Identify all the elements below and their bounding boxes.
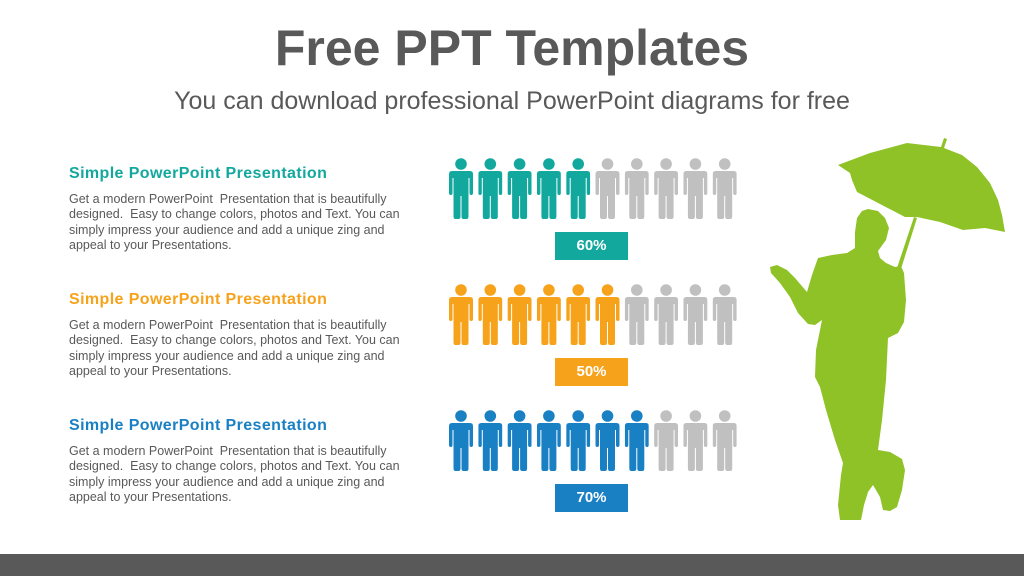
- label 50%: [555, 358, 628, 386]
- text block 1: Get a modern PowerPoint Presentation that is beautifully designed. Easy to change colors, photos and Text. You can simply impress your audience and add a unique zing and appeal to your Presentations.: [69, 192, 400, 252]
- label 70%: 70%: [576, 489, 607, 506]
- text block 3: [69, 417, 400, 504]
- text block 1: Simple PowerPoint Presentation: [69, 165, 327, 182]
- text block 1: [69, 165, 400, 252]
- text block 3: Get a modern PowerPoint Presentation that is beautifully designed. Easy to change colors, photos and Text. You can simply impress your audience and add a unique zing and appeal to your Presentations.: [69, 444, 400, 504]
- title: Free PPT Templates: [275, 20, 749, 76]
- label 60%: 60%: [576, 237, 607, 254]
- text block 2: Simple PowerPoint Presentation: [69, 291, 327, 308]
- footer bar: [0, 554, 1024, 576]
- text block 2: [69, 291, 400, 378]
- label 50%: 50%: [576, 363, 607, 380]
- label 70%: [555, 484, 628, 512]
- text block 2: Get a modern PowerPoint Presentation that is beautifully designed. Easy to change colors, photos and Text. You can simply impress your audience and add a unique zing and appeal to your Presentations.: [69, 318, 400, 378]
- subtitle: You can download professional PowerPoint diagrams for free: [174, 87, 850, 115]
- people row 2: [449, 284, 737, 345]
- people row 1: [449, 158, 737, 219]
- text block 3: Simple PowerPoint Presentation: [69, 417, 327, 434]
- people row 3: [449, 410, 737, 471]
- label 60%: [555, 232, 628, 260]
